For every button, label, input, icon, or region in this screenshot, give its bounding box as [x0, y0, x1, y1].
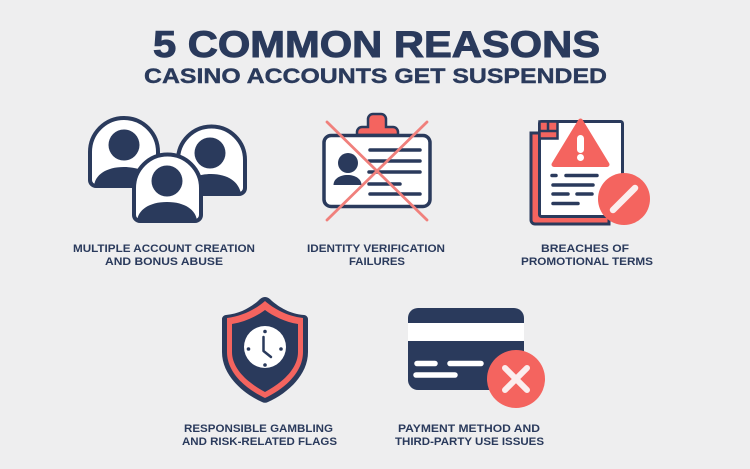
label: identity: FAILURES — [349, 256, 405, 268]
red cross — [327, 122, 427, 220]
label: responsible gambling — [182, 423, 337, 448]
label: payment — [395, 423, 544, 448]
icon: shield with clock — [222, 297, 308, 403]
label: responsible gambling: AND RISK-RELATED FLAGS — [182, 436, 337, 448]
label: multiple account: AND BONUS ABUSE — [105, 256, 223, 268]
label: breaches: PROMOTIONAL TERMS — [521, 256, 653, 268]
back left avatar — [90, 118, 158, 186]
clip — [357, 114, 398, 135]
prohibited badge — [598, 173, 650, 225]
label: identity — [307, 243, 445, 268]
label: payment: PAYMENT METHOD AND — [398, 423, 540, 435]
front avatar — [134, 154, 201, 221]
icon: document with warning — [531, 121, 650, 225]
card — [324, 136, 430, 206]
card lines — [416, 364, 481, 375]
label: breaches — [521, 243, 653, 268]
icon: multiple accounts — [90, 118, 245, 221]
text lines — [369, 150, 420, 194]
label: identity: IDENTITY VERIFICATION — [307, 243, 445, 255]
icon: credit card with x — [408, 308, 545, 408]
card — [408, 308, 524, 390]
label: responsible gambling: RESPONSIBLE GAMBLING — [184, 423, 333, 435]
title: 5 COMMON REASONS — [153, 23, 600, 65]
stripe — [408, 323, 524, 341]
shield outer — [222, 297, 308, 403]
doc lines — [552, 176, 597, 204]
label: multiple account — [73, 243, 255, 268]
front page — [540, 122, 622, 216]
warning triangle — [554, 121, 607, 164]
title: CASINO ACCOUNTS GET SUSPENDED — [144, 64, 607, 88]
label: multiple account: MULTIPLE ACCOUNT CREATION — [73, 243, 255, 255]
label: breaches: BREACHES OF — [541, 243, 629, 255]
clock — [244, 326, 286, 368]
icon: id card crossed — [324, 114, 430, 220]
back page — [531, 133, 609, 224]
shield red band — [227, 301, 303, 398]
person — [334, 153, 362, 185]
binder tabs — [540, 122, 558, 138]
shield inner — [232, 310, 298, 392]
title — [144, 23, 607, 88]
label: payment: THIRD-PARTY USE ISSUES — [395, 436, 544, 448]
x badge — [487, 350, 545, 408]
back right avatar — [178, 126, 245, 194]
